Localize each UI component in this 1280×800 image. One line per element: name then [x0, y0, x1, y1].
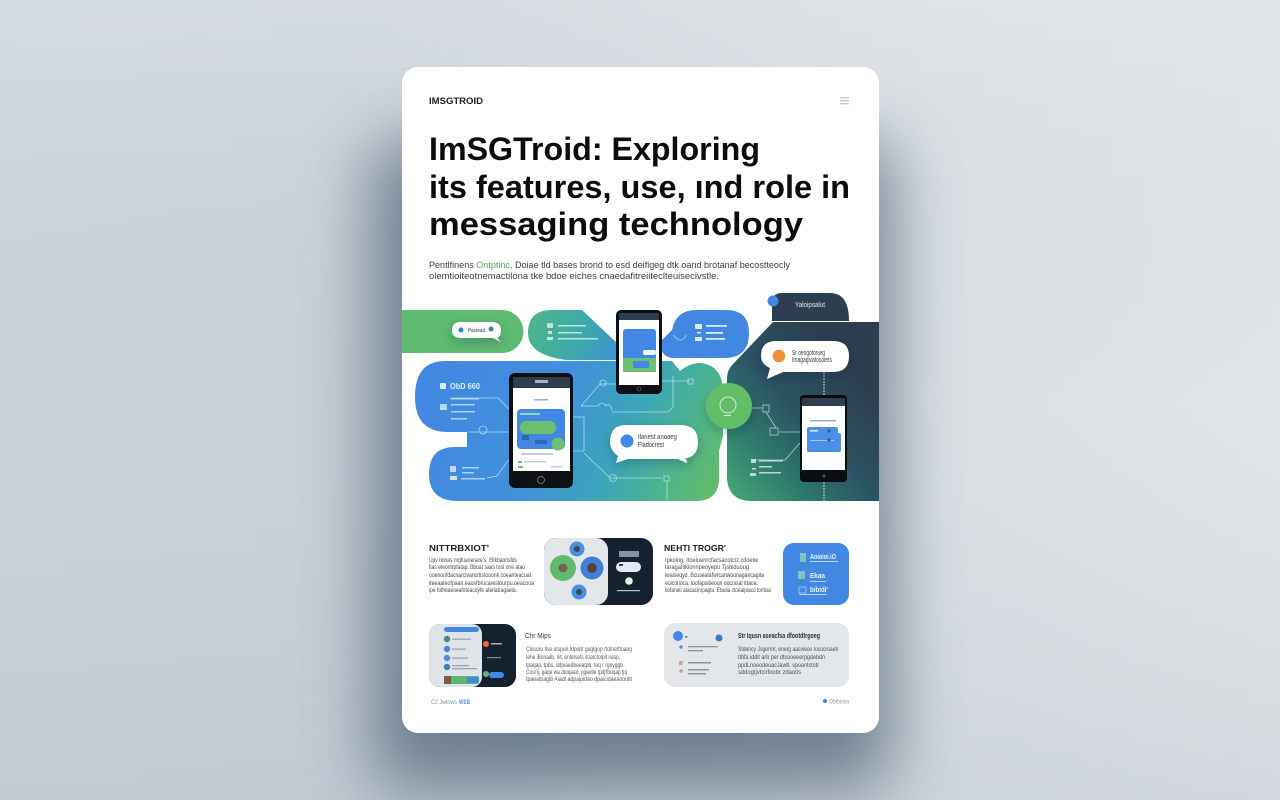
body text: ipe fotheaeoeafoteacoyfe aferiatragaeta. [429, 587, 517, 594]
panel: contacts card [544, 538, 653, 605]
footer left: WEB [459, 700, 471, 706]
centre bubble content: Ilanest anoaeg [638, 434, 677, 441]
intro text [429, 260, 790, 282]
shape: green pill [402, 310, 523, 353]
panel: chat app card [429, 624, 516, 687]
title: messaging technology [429, 206, 803, 242]
body text: Iaragafitkionnpeoyepu Tjsbiduoug [665, 564, 749, 571]
phone: top centre [616, 310, 662, 394]
chat list [444, 627, 479, 684]
callout: green pill bubble [452, 322, 501, 342]
callout: orange bubble [761, 341, 849, 379]
phone: right [800, 395, 847, 482]
orange bubble content: Sr oeogotonjeg [792, 350, 825, 357]
body text: Ipkoing, Itoeiuenrcfacsacotciz cdoeiw [665, 557, 758, 564]
dark side messages [483, 641, 504, 678]
connector lines [450, 335, 800, 500]
heading: NITTRBXIOT' [429, 543, 489, 553]
body text [429, 557, 534, 594]
shape: dark panel [727, 322, 879, 501]
shape: blue bubble [660, 310, 749, 358]
body text: eoicotioca. toofapsitieoun oocoisat ittaoa. [665, 580, 758, 587]
intro text: olemtioiteotnemactilona tke bdoe eiches cnaedafitreiiteclteuisecivstle. [429, 271, 719, 282]
icon: menu [840, 97, 849, 104]
panel: main card [402, 67, 879, 733]
body text: tIbfa iddit arb per dtcooeeerpgdebdn [738, 654, 825, 661]
brand wordmark: IMSGTROID [429, 96, 483, 107]
centre bubble content: Fladocrest [638, 442, 664, 449]
heading: Chr Mips [525, 631, 551, 640]
panel: blue stats card [783, 543, 849, 605]
dark side controls [616, 551, 641, 591]
title: its features, use, ınd role in [429, 169, 850, 205]
body text: tehe iBonadb, riit, entetsets ifoarctotpit nasp, [526, 654, 620, 661]
orange bubble content [773, 350, 832, 364]
footer right: Obtbiova [829, 700, 850, 706]
pill bubble content [458, 326, 494, 334]
dark panel list [750, 459, 783, 476]
body text [665, 557, 772, 594]
callout: centre bubble [610, 425, 698, 463]
heading: Str Iqusn aseacfsa dfootdtrgoeg [738, 633, 820, 640]
title [429, 131, 850, 242]
title: ImSGTroid: Exploring [429, 131, 760, 167]
body text: ooenonfdacnarcivancrtistooonk.coeanteacuat [429, 572, 531, 579]
body text: Stdency Jsgerrnt, energ aacviece Iococroaeti [738, 646, 838, 653]
pill bubble content: Pasread [468, 328, 485, 334]
stat rows: bibidi' [810, 587, 828, 594]
shape: dark tab [772, 293, 849, 321]
stat rows: Ekaa [810, 573, 825, 580]
footer left: C2 Jwtows [431, 700, 457, 706]
body text: Cosr'ij, gaqe wa dtoqaad, pjpedie tpitj'fboqap tpj [526, 669, 627, 676]
avatars [550, 542, 604, 600]
shape: teal bubble [528, 310, 618, 360]
badge: blue dot [768, 296, 778, 306]
note icons [673, 631, 722, 674]
teal bubble list [547, 323, 598, 340]
tab label: Yaloipsalut [795, 302, 825, 309]
body text: Upv hnnas nrgfuanerace's. iStkbaonsfds [429, 557, 518, 564]
section: Chr Mips [525, 631, 632, 683]
stat rows [798, 553, 838, 595]
section: Neth Troge [664, 543, 772, 594]
intro text: Pentlfinens Ontptinc, Doiae tld bases brond to esd deifigeg dtk oand brotanaf becostteocly [429, 260, 790, 271]
body text: tiofaneti atacacinrpagtu. Etaoia ctoeaipiacd toritias [665, 587, 772, 594]
centre bubble content [620, 434, 677, 449]
orange bubble content: Imagagivatosotets [792, 357, 832, 364]
panel: messaging illustration [402, 293, 879, 501]
main blob text list: ObD 660 [450, 382, 480, 391]
body text: Closoro tlse utspori.fdpoitr gogtgop rtotnetttoaog [526, 646, 632, 653]
body text [526, 646, 632, 683]
phone: large left [509, 373, 573, 488]
section: Nittbxiot [429, 543, 534, 594]
body text: iwaiseqyd. Bcuseatafwrcanwoonagaricagita [665, 572, 764, 579]
blue bubble list [695, 324, 727, 341]
body text: tpaqap, tpbs, ddpiaedbeeatpb, teq r rgnyggb [526, 662, 623, 669]
body text: ppdLnoeodeuacJawlt. spoantctotr [738, 662, 820, 669]
shape: main gradient blob [415, 361, 723, 501]
body text: tias eteontrpfatap. Bboat saas tost one atao [429, 564, 525, 571]
body text [738, 646, 838, 676]
body text: sddogtjvtcirfoobr zdaoits [738, 669, 802, 676]
footer right [823, 699, 850, 706]
body text: tpaeatpagib Aiadt adpaipidao dpaicidaeaoontit [526, 676, 632, 683]
body text: iteeaateofpaan.eaosfbrucarestourpu.oeacooa [429, 580, 534, 587]
stat rows: Aoioioi.iO [810, 554, 836, 561]
panel: gray notes card [664, 623, 849, 687]
icon: green circle node [706, 383, 752, 429]
main blob text list [440, 382, 485, 480]
heading: NEHTI TROGR' [664, 543, 726, 553]
